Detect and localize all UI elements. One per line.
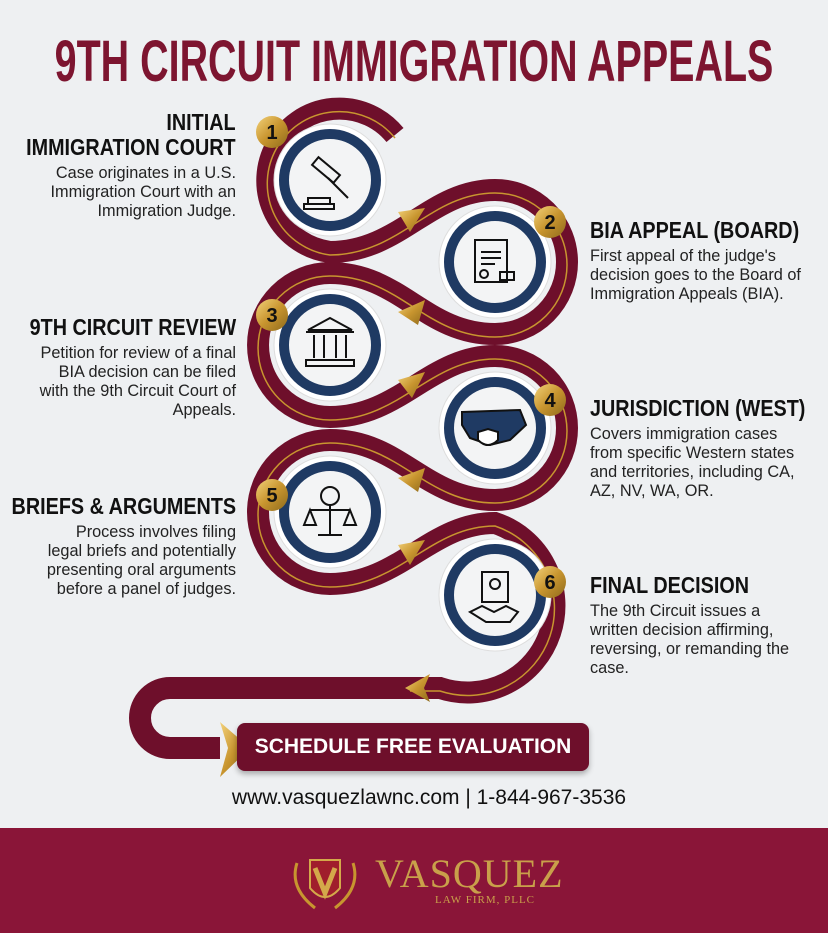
step 1 text: Case originates in a U.S. [56, 164, 236, 182]
step 2 text: BIA APPEAL (BOARD) [590, 217, 799, 243]
number badges: 3 [266, 305, 278, 327]
step 6 text: The 9th Circuit issues a [590, 602, 760, 620]
step 1 text: Immigration Court with an [50, 183, 236, 201]
step 6 text: case. [590, 659, 629, 677]
step 6 text [590, 572, 789, 677]
step 4 text: JURISDICTION (WEST) [590, 395, 805, 421]
step 5 text: BRIEFS & ARGUMENTS [11, 493, 236, 519]
step 4 text [590, 395, 805, 500]
step 1 text: IMMIGRATION COURT [26, 134, 236, 160]
contact line: www.vasquezlawnc.com | 1-844-967-3536 [232, 786, 626, 809]
step 3 text: Appeals. [173, 401, 236, 419]
number badges: 2 [544, 212, 556, 234]
logo: LAW FIRM, PLLC [435, 894, 535, 906]
logo [294, 851, 564, 910]
step 3 text: with the 9th Circuit Court of [40, 382, 236, 400]
step 3 text: 9TH CIRCUIT REVIEW [29, 314, 236, 340]
CTA button: SCHEDULE FREE EVALUATION [255, 735, 571, 758]
path: winding ribbon [140, 109, 567, 748]
step 5 text [11, 493, 236, 598]
step 6 text: FINAL DECISION [590, 572, 749, 598]
footer band with logo [0, 828, 828, 933]
step 1 text [26, 109, 236, 220]
title: 9TH CIRCUIT IMMIGRATION APPEALS [55, 29, 773, 94]
step 6 text: reversing, or remanding the [590, 640, 789, 658]
step 6 text: written decision affirming, [590, 621, 773, 639]
step 5 text: before a panel of judges. [57, 580, 236, 598]
step 2 text: decision goes to the Board of [590, 266, 801, 284]
step 3 text [29, 314, 236, 419]
logo: VASQUEZ [375, 851, 564, 896]
step 2 text [590, 217, 801, 303]
CTA button [237, 723, 589, 771]
step 5 text: presenting oral arguments [47, 561, 236, 579]
step 4 text: Covers immigration cases [590, 425, 777, 443]
icons [304, 157, 526, 622]
step 2 text: First appeal of the judge's [590, 247, 776, 265]
step 3 text: BIA decision can be filed [59, 363, 236, 381]
step 3 text: Petition for review of a final [41, 344, 236, 362]
arrows [220, 208, 430, 777]
number badges: 6 [544, 572, 556, 594]
number badges: 5 [266, 485, 278, 507]
step 4 text: and territories, including CA, [590, 463, 795, 481]
step 2 text: Immigration Appeals (BIA). [590, 285, 784, 303]
step 4 text: from specific Western states [590, 444, 794, 462]
step 5 text: legal briefs and potentially [48, 542, 236, 560]
number badges [256, 116, 566, 598]
step 5 text: Process involves filing [76, 523, 236, 541]
number badges: 4 [544, 390, 556, 412]
step 4 text: AZ, NV, WA, OR. [590, 482, 714, 500]
step 1 text: INITIAL [167, 109, 236, 135]
step 1 text: Immigration Judge. [98, 202, 236, 220]
circles [274, 124, 551, 651]
number badges: 1 [266, 122, 278, 144]
